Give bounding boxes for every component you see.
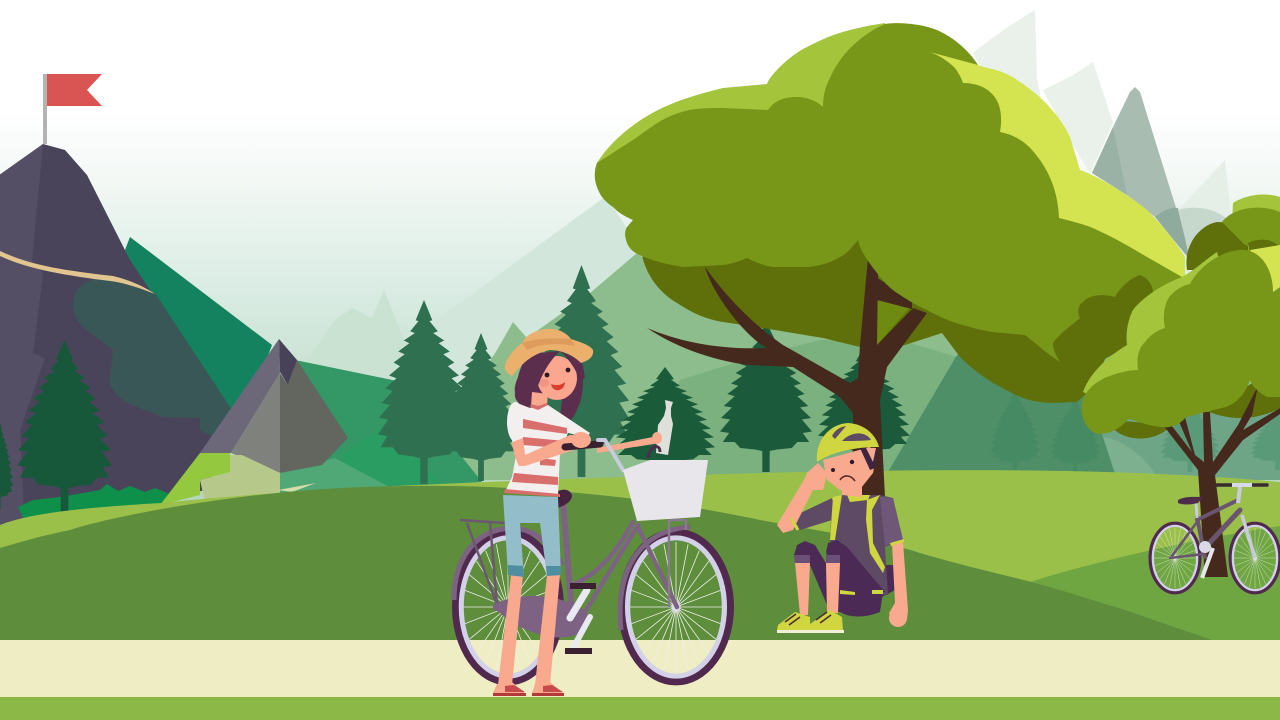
footpath (0, 640, 1280, 697)
parked bicycle frame (1170, 500, 1240, 558)
small tree trunk (1163, 386, 1280, 577)
far arm holding bottle (597, 437, 660, 453)
parked bicycle crank (1199, 541, 1211, 553)
chain guard (493, 596, 588, 638)
canopy light back (597, 23, 900, 200)
handlebar (565, 444, 600, 447)
small tree main crown (1082, 250, 1280, 434)
facial features (831, 468, 835, 472)
pine forest background (533, 265, 1280, 477)
pine trees on mountain (0, 340, 112, 512)
waist band (840, 590, 883, 595)
pines in front of green mountain (378, 300, 517, 484)
front wheel (621, 532, 731, 682)
fork stem (669, 520, 686, 607)
shirt stripes (504, 419, 567, 497)
parked bicycle right (1150, 485, 1280, 593)
straw hat (505, 329, 593, 376)
hat band (522, 338, 575, 350)
yellow backpack straps (830, 495, 842, 540)
seat of pants (840, 592, 883, 616)
grass strip (0, 697, 1280, 720)
left leg of pants (794, 541, 845, 612)
small right tree (1082, 195, 1280, 577)
pedals and cranks (565, 583, 596, 654)
parked bicycle saddle (1178, 497, 1203, 504)
cheeks (539, 379, 549, 387)
right sleeve (880, 497, 903, 546)
raised arm (777, 463, 827, 533)
right hand (889, 609, 907, 627)
water bottle (656, 400, 673, 455)
seated man with helmet (777, 423, 908, 633)
triangle of leaves between branches (877, 298, 912, 345)
fenders (454, 528, 562, 600)
collar (847, 495, 870, 502)
main bicycle (454, 490, 731, 682)
small tree rear crown (1230, 195, 1280, 260)
bicycle frame (497, 500, 677, 625)
front dark green hill (0, 486, 1212, 640)
striped shirt (505, 403, 590, 495)
small grey pyramid mountain (160, 339, 348, 505)
right mid green hill (1030, 526, 1280, 650)
face (537, 356, 577, 400)
small tree under shadow (1110, 420, 1172, 439)
flag on summit (43, 74, 102, 144)
canopy dark blob (1053, 275, 1153, 370)
legs (498, 575, 523, 685)
back light green hill (0, 470, 1280, 650)
teal shadow on mountain (73, 277, 232, 437)
collar (530, 403, 548, 410)
parked bicycle handlebar (1217, 483, 1267, 487)
mid green mountains (420, 253, 1280, 480)
eyes and mouth (545, 373, 549, 377)
helmet (817, 423, 879, 462)
neck (531, 392, 548, 406)
backpack lower (882, 565, 897, 597)
saddle (558, 490, 572, 508)
large tree (595, 23, 1185, 497)
big dark mountain with path (0, 144, 232, 530)
helmet strap (860, 448, 878, 470)
shins (795, 563, 810, 615)
hair back (515, 353, 584, 422)
large tree trunk and branches (647, 258, 927, 497)
neck and face (842, 482, 862, 497)
rear wheel (455, 532, 561, 682)
green bushes strip (18, 484, 170, 522)
small tree light crown (1083, 252, 1230, 400)
distant pale mountains (300, 10, 1232, 420)
sandals (493, 682, 564, 696)
shorts (503, 495, 561, 577)
canopy main (595, 23, 1182, 362)
shoes (777, 610, 844, 633)
canopy underside (642, 220, 1160, 403)
torso (830, 495, 903, 595)
near arm (512, 435, 590, 466)
woman with hat (493, 329, 660, 696)
woman's hand (571, 432, 591, 448)
fringe (534, 351, 585, 392)
right leg of pants (826, 540, 885, 600)
mountain trail (0, 251, 155, 294)
green mountains left (125, 237, 482, 500)
knee bands (794, 555, 840, 563)
basket and bottle (565, 400, 708, 521)
sky gradient (0, 0, 1280, 560)
hand on bottle (652, 432, 662, 444)
raised sleeve (792, 498, 832, 530)
shirt sleeve (507, 402, 524, 442)
right arm (889, 542, 908, 622)
basket (623, 460, 708, 521)
rear rack (460, 520, 505, 605)
canopy yellow highlight (915, 46, 1185, 290)
hand on forehead (807, 463, 827, 490)
